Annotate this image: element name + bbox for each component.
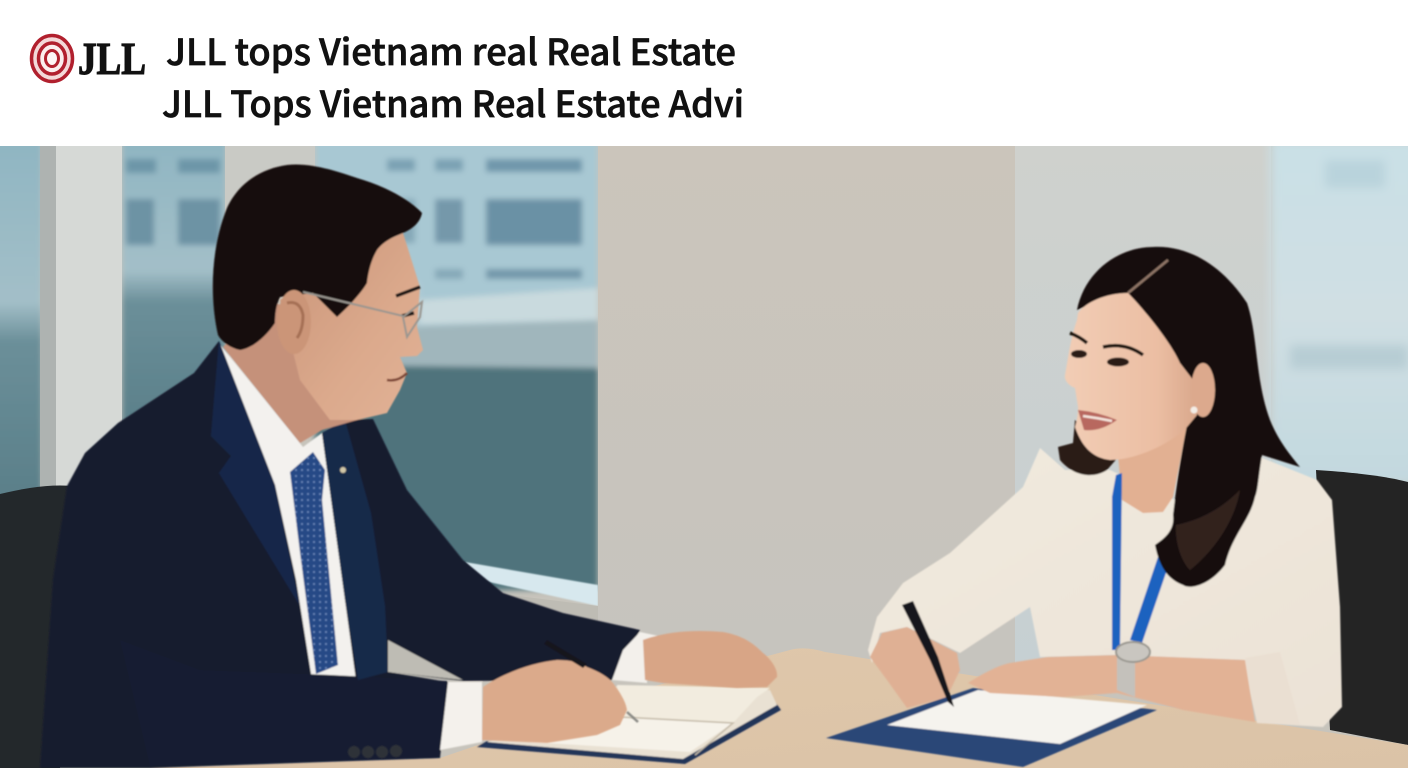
- woman: pen: [902, 601, 954, 707]
- woman: brows, eyes and lips: [1070, 333, 1143, 430]
- man: neck: [223, 300, 357, 443]
- man: gap between arm and body: [388, 640, 463, 680]
- woman: lower hair highlight: [1176, 490, 1240, 570]
- woman: hair: [1077, 247, 1300, 587]
- man: face: [280, 233, 423, 420]
- woman: neck: [1118, 425, 1187, 513]
- icon: JLL logo: JLL: [78, 33, 146, 84]
- man: jacket body and far arm: [40, 341, 640, 768]
- woman: blouse cuff: [1245, 652, 1300, 725]
- man: far hand: [643, 631, 777, 688]
- man: lower arm sleeve shading: [120, 640, 447, 766]
- woman: right hand and forearm: [968, 655, 1255, 722]
- man: pen: [544, 640, 638, 722]
- person: man: [40, 164, 777, 768]
- title: JLL tops Vietnam real Real Estate: [166, 24, 736, 76]
- icon: JLL logo: [32, 33, 146, 84]
- woman: lanyard: [1112, 473, 1168, 650]
- woman: hair parting: [1128, 260, 1168, 293]
- woman: watch: [1116, 642, 1150, 697]
- chair: right: [1316, 470, 1408, 745]
- man: near hand: [482, 660, 627, 743]
- man: hair: [213, 164, 422, 350]
- man: near cuff: [440, 682, 482, 750]
- woman: left hand: [870, 627, 960, 708]
- notebook: [477, 685, 781, 764]
- woman: ear and earring: [1190, 363, 1215, 417]
- title: JLL Tops Vietnam Real Estate Advi: [162, 76, 744, 128]
- man: tie: [290, 452, 338, 674]
- person: woman: [826, 247, 1342, 767]
- chair: left: [0, 485, 72, 768]
- title: [162, 24, 744, 128]
- man: ear: [277, 290, 311, 354]
- man: far cuff: [612, 632, 668, 683]
- woman: face: [1065, 293, 1197, 460]
- man: mouth: [387, 373, 407, 380]
- clipboard: [826, 688, 1157, 767]
- woman: blouse: [868, 448, 1342, 727]
- man: brow and eye: [396, 287, 420, 316]
- table: [150, 648, 1408, 768]
- header band: [0, 0, 1408, 146]
- woman: left hair lock: [1058, 420, 1120, 475]
- man: shirt: [218, 342, 356, 680]
- man: glasses: [303, 292, 422, 337]
- man: lapel pin: [340, 467, 346, 473]
- man: left lapel: [211, 341, 300, 606]
- man: right lapel: [322, 420, 388, 680]
- man: jacket buttons: [348, 745, 402, 758]
